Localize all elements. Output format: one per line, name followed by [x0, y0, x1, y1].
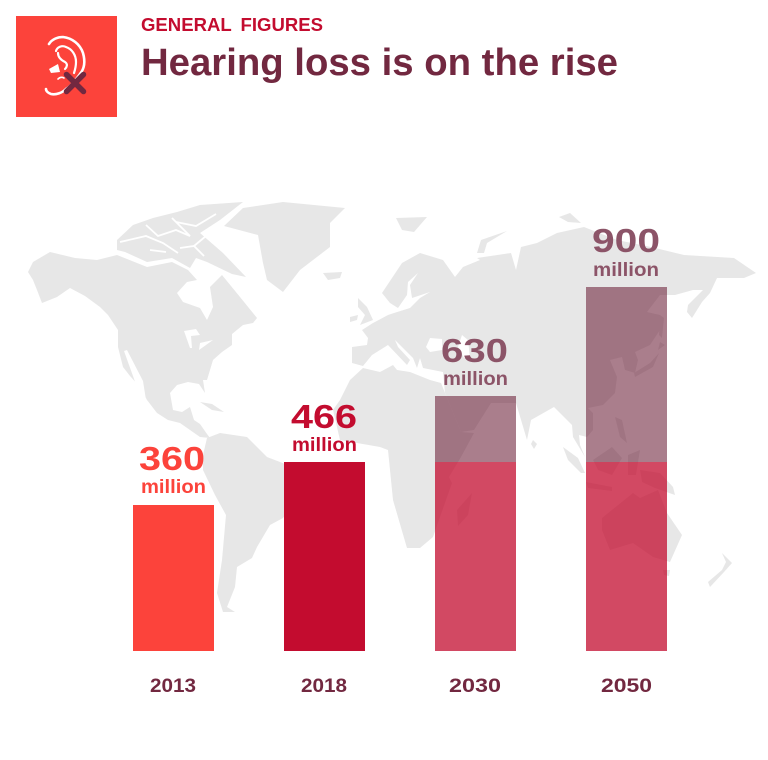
south east asia — [563, 417, 675, 495]
sri lanka — [531, 440, 537, 449]
bar: 2013 — [133, 505, 214, 651]
eurasia — [352, 227, 756, 457]
novaya zemlya — [477, 231, 507, 253]
year labels: 2050 — [601, 676, 652, 697]
svalbard — [396, 217, 427, 232]
africa — [333, 365, 474, 548]
world map — [28, 202, 756, 612]
icon: cross mark — [66, 74, 84, 92]
value label: 900 million: 900 — [592, 222, 660, 259]
value label: 466 million: million — [292, 434, 357, 456]
severnaya zemlya — [559, 213, 581, 223]
icon: ear tragus — [49, 64, 60, 73]
japan — [634, 315, 665, 377]
value label: 466 million — [291, 398, 357, 456]
value label: 360 million — [139, 440, 206, 498]
greenland — [224, 202, 345, 292]
year labels: 2030 — [449, 676, 501, 697]
new zealand — [708, 553, 732, 587]
cuba — [200, 402, 224, 412]
title: Hearing loss is on the rise — [141, 42, 618, 84]
value label: 466 million: 466 — [291, 398, 357, 435]
value label: 630 million — [441, 332, 508, 390]
eyebrow heading: GENERAL FIGURES — [141, 14, 323, 35]
madagascar — [457, 493, 472, 526]
value label: 630 million: million — [443, 368, 508, 390]
value label: 900 million — [592, 222, 660, 281]
year labels: 2018 — [301, 676, 347, 697]
value label: 360 million: million — [141, 476, 206, 498]
year labels — [150, 676, 652, 697]
bar: 2050 — [586, 287, 667, 651]
value label: 900 million: million — [593, 259, 659, 281]
tasmania — [663, 570, 670, 576]
inland water — [124, 329, 470, 400]
north america — [28, 252, 257, 438]
bar: 2030 — [435, 396, 516, 651]
year labels: 2013 — [150, 676, 196, 697]
australia — [602, 490, 682, 562]
value label: 360 million: 360 — [139, 440, 205, 477]
british isles — [350, 298, 373, 325]
icon: ear with cross — [16, 16, 117, 117]
value label: 630 million: 630 — [441, 332, 508, 369]
arctic islands — [117, 202, 246, 277]
south america — [203, 433, 310, 612]
iceland — [323, 272, 342, 280]
bar: 2018 — [284, 462, 365, 651]
